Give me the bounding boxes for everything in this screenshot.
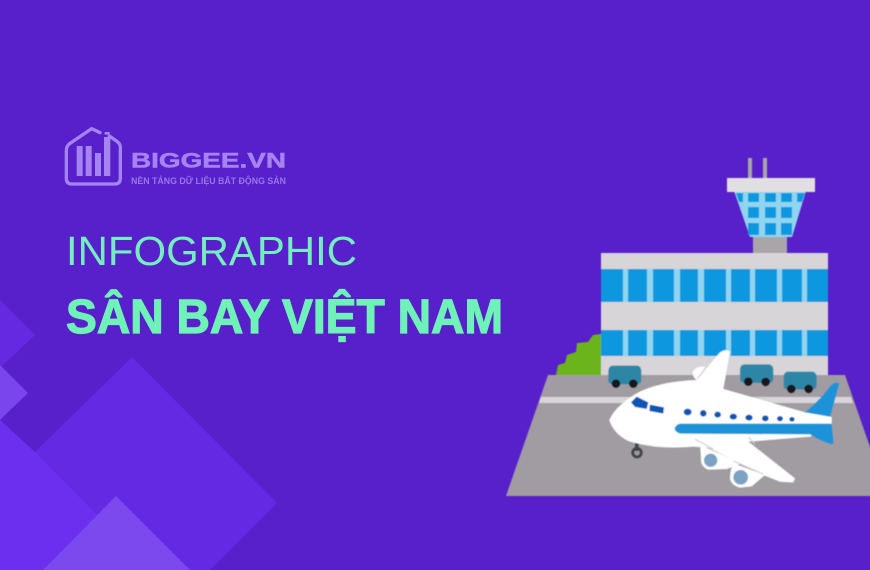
fuselage and wings: [609, 350, 832, 482]
bush: [556, 334, 601, 375]
heading: INFOGRAPHIC: INFOGRAPHIC: [66, 228, 357, 274]
logo: BIGGEE.VN: [66, 129, 286, 186]
wing edge: [695, 371, 763, 474]
lower tail fin: [810, 424, 834, 444]
terminal building: [601, 253, 828, 376]
fuselage stripe: [675, 424, 813, 434]
cabin windows: [684, 409, 795, 422]
logo tagline: NỀN TẢNG DỮ LIỆU BẤT ĐỘNG SẢN: [131, 175, 286, 186]
runway apron: [506, 375, 870, 496]
cockpit windows: [631, 397, 664, 414]
icon: house with bars: [66, 129, 120, 184]
title: SÂN BAY VIỆT NAM: SÂN BAY VIỆT NAM: [66, 289, 503, 344]
upper tail fin: [804, 383, 839, 418]
control tower: [727, 158, 815, 254]
airplane: [609, 350, 839, 488]
engines: [700, 445, 765, 488]
parked vehicles: [608, 364, 817, 393]
illustration: airport: [506, 158, 870, 496]
rear stabiliser: [693, 367, 705, 380]
nose gear: [633, 442, 641, 457]
background diamonds: [0, 300, 277, 570]
logo wordmark: BIGGEE.VN: [131, 150, 286, 172]
